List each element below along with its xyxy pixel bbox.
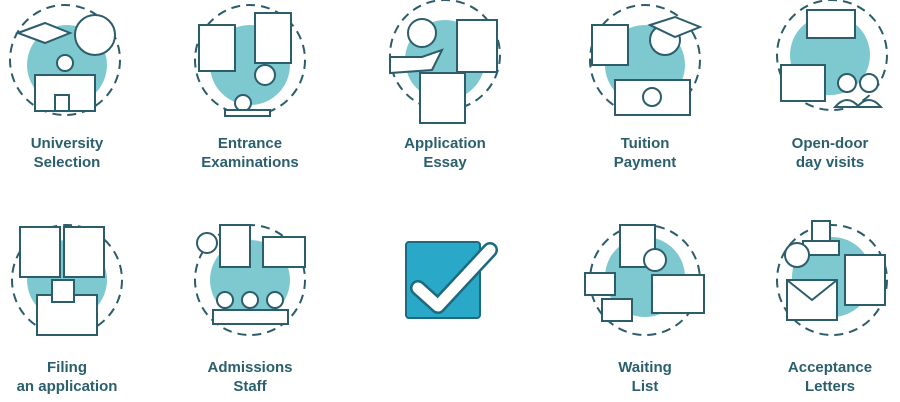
icon: acceptance letters	[776, 220, 888, 336]
label: Acceptance Letters: Letters	[805, 378, 855, 395]
icon: tuition payment	[589, 4, 702, 116]
label: Application Essay: Essay	[423, 154, 467, 171]
label: Waiting List: List	[632, 378, 658, 395]
label: Open-door day visits: day visits	[796, 154, 864, 171]
label: Tuition Payment: Tuition	[621, 135, 669, 152]
icon: filing an application	[11, 224, 123, 336]
label: Filing an application	[17, 359, 117, 395]
label: Waiting List: Waiting	[618, 359, 672, 376]
label: Entrance Examinations	[201, 135, 299, 171]
label: Filing an application: an application	[17, 378, 117, 395]
label: Acceptance Letters	[788, 359, 872, 395]
label: Tuition Payment: Payment	[614, 154, 676, 171]
label: Waiting List	[618, 359, 672, 395]
label: Entrance Examinations: Examinations	[201, 154, 299, 171]
label: University Selection: University	[31, 135, 103, 152]
icon: admissions staff	[194, 224, 306, 336]
label: Admissions Staff	[207, 359, 293, 395]
label: Entrance Examinations: Entrance	[218, 135, 282, 152]
icon: entrance examinations	[194, 4, 306, 117]
icon: open-door day visits	[776, 0, 888, 111]
label: Admissions Staff: Admissions	[207, 359, 293, 376]
icon: checkbox	[405, 241, 498, 319]
label: Application Essay: Application	[404, 135, 486, 152]
label: Open-door day visits: Open-door	[792, 135, 868, 152]
label: Open-door day visits	[792, 135, 868, 171]
label: Filing an application: Filing	[47, 359, 87, 376]
icon: university selection	[9, 4, 121, 116]
icon: application essay	[389, 0, 501, 124]
label: Acceptance Letters: Acceptance	[788, 359, 872, 376]
label: University Selection	[31, 135, 104, 171]
label: Tuition Payment	[614, 135, 676, 171]
label: University Selection: Selection	[34, 154, 100, 171]
icon: waiting list	[584, 224, 705, 336]
label: Admissions Staff: Staff	[233, 378, 267, 395]
label: Application Essay	[404, 135, 486, 171]
